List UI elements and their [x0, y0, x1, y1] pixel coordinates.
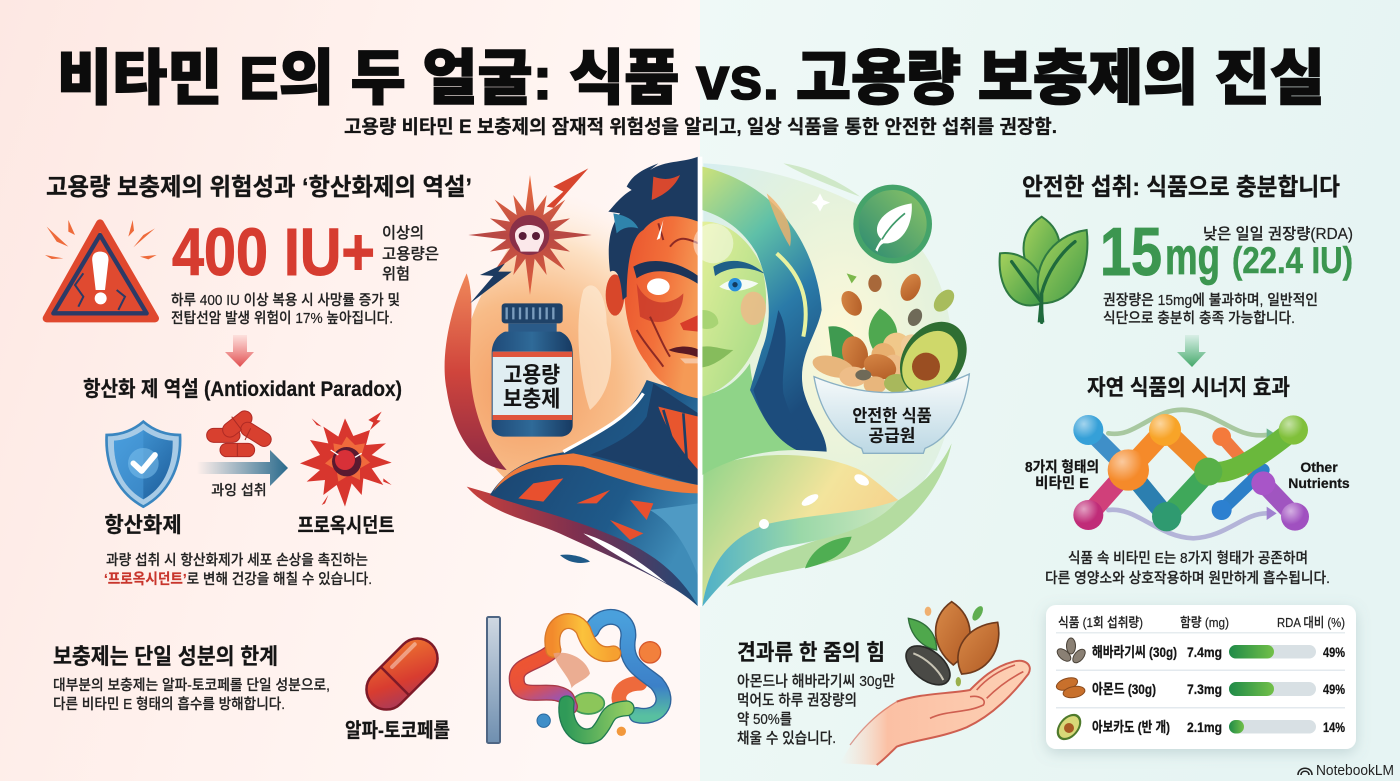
text: single ingredient body: 다른 비타민 E 형태의 흡수를 방해합니다. [53, 696, 285, 713]
row: sunflower seeds: 49% [1323, 644, 1345, 660]
text: mortality risk [171, 292, 400, 327]
text: RDA body [1103, 292, 1318, 327]
synergy arrows [1108, 410, 1277, 538]
title: 비타민 E의 두 얼굴: 식품 vs. 고용량 보충제의 진실 [57, 45, 1325, 112]
text: RDA body: 권장량은 15mg에 불과하며, 일반적인 [1103, 292, 1318, 309]
diagram: molecule synergy [1073, 410, 1309, 538]
woman hair [702, 167, 827, 452]
icon: supplement bottle [492, 303, 573, 437]
sparkle [812, 193, 830, 212]
heading: synergy: 자연 식품의 시너지 효과 [1087, 375, 1290, 400]
row: avocado: 14% [1323, 719, 1345, 735]
text: paradox explanation: 과량 섭취 시 항산화제가 세포 손상을 촉진하는 [106, 552, 368, 569]
stat: 400 IU+: 400 IU+ [172, 215, 375, 290]
panel: single ingredient limit [53, 617, 663, 743]
stat caption: 위험 [382, 265, 410, 283]
label: eight forms: 8가지 형태의 [1025, 459, 1099, 476]
green outer sweep [727, 443, 952, 587]
woman face [702, 222, 766, 397]
stat caption [382, 224, 439, 283]
center divider [698, 157, 702, 607]
stat: 15mg [1100, 214, 1353, 290]
text: synergy body [1045, 550, 1330, 587]
icon: vitamin E forms swirl [517, 617, 663, 736]
heading: antioxidant paradox: 항산화 제 역설 (Antioxidant Paradox) [83, 378, 402, 401]
icon: capsule [358, 630, 446, 718]
heading: single ingredient: 보충제는 단일 성분의 한계 [53, 644, 278, 669]
text: synergy body: 식품 속 비타민 E는 8가지 형태가 공존하며 [1068, 550, 1308, 567]
text: paradox explanation: ‘프로옥시던트’로 변해 건강을 해칠 수 있습니다. [104, 571, 372, 588]
text: mortality risk: 전탑선암 발생 위험이 17% 높아집니다. [171, 310, 393, 327]
label: alpha tocopherol: 알파-토코페롤 [345, 719, 450, 742]
panel: handful of nuts [737, 602, 1030, 765]
heading: supplement risk: 고용량 보충제의 위험성과 ‘항산화제의 역설’ [46, 174, 472, 201]
subtitle: 고용량 비타민 E 보충제의 잠재적 위험성을 알리고, 일상 식품을 통한 안전한 섭취를 권장함. [344, 116, 1057, 138]
text: single ingredient body: 대부분의 보충제는 알파-토코페롤 단일 성분으로, [53, 677, 330, 694]
bowl label: 안전한 식품 [852, 407, 932, 426]
table header: 식품 (1회 섭취량) [1058, 615, 1143, 630]
icon: green leaves [1000, 217, 1087, 322]
panel: food table [1046, 605, 1356, 749]
row: almonds [1055, 675, 1345, 699]
arrow: down red [225, 335, 254, 367]
text: single ingredient body [53, 677, 330, 713]
soft safe background [703, 163, 954, 550]
label: excess intake: 과잉 섭취 [211, 482, 267, 498]
background: right panel [700, 0, 1400, 781]
left half: toxic man [445, 157, 698, 607]
text: nuts body: 채울 수 있습니다. [737, 730, 836, 747]
leaf badge [853, 185, 932, 263]
central illustration: two faces [445, 157, 980, 607]
stat: 15mg: 15 [1100, 214, 1162, 290]
row: sunflower seeds: 해바라기씨 (30g) [1092, 644, 1177, 660]
text: mortality risk: 하루 400 IU 이상 복용 시 사망률 증가 및 [171, 292, 400, 309]
label: other nutrients [1288, 459, 1350, 491]
stat: 15mg: (22.4 IU) [1232, 240, 1353, 281]
bottle label text 2: 보충제 [503, 387, 560, 412]
woman body [702, 455, 898, 607]
label: other nutrients: Other [1300, 459, 1338, 475]
row: avocado [1052, 709, 1345, 745]
heading: nuts: 견과류 한 줌의 힘 [737, 640, 885, 665]
man face [622, 208, 698, 398]
bottle label text: 고용량 [503, 362, 560, 387]
stat caption: 낮은 일일 권장량(RDA) [1203, 225, 1353, 243]
man body [490, 380, 698, 607]
icon: prooxidant burst [300, 412, 392, 507]
label: eight forms [1025, 459, 1099, 492]
icon: avocado [1052, 709, 1086, 745]
text: nuts body: 아몬드나 해바라기씨 30g만 [737, 673, 895, 690]
man hair [608, 157, 698, 300]
background: left panel [0, 0, 700, 781]
icon: almonds [1055, 675, 1086, 699]
row: sunflower seeds: 7.4mg [1187, 644, 1222, 660]
arrow: excess intake [197, 450, 288, 486]
icon: skull burst [468, 168, 592, 303]
table header [1058, 615, 1345, 630]
dark red sweep [445, 273, 507, 470]
man ear [606, 274, 624, 316]
stat caption: 고용량은 [382, 245, 439, 263]
row: avocado: 2.1mg [1187, 719, 1222, 735]
text: paradox explanation [104, 552, 372, 588]
text: RDA body: 식단으로 충분히 충족 가능합니다. [1103, 310, 1295, 327]
label: other nutrients: Nutrients [1288, 475, 1350, 491]
icon: red pills [207, 408, 274, 457]
label: antioxidant: 항산화제 [104, 514, 182, 537]
heading: safe intake: 안전한 섭취: 식품으로 충분합니다 [1022, 174, 1340, 201]
lower sweep [467, 487, 698, 607]
text: synergy body: 다른 영양소와 상호작용하며 원만하게 흡수됩니다. [1045, 570, 1330, 587]
label: eight forms: 비타민 E [1035, 475, 1089, 492]
icon: warning triangle [45, 220, 157, 318]
warm flame background [463, 173, 698, 480]
label: prooxidant: 프로옥시던트 [298, 514, 394, 537]
food bowl [810, 308, 980, 453]
row: almonds: 7.3mg [1187, 681, 1222, 697]
row: sunflower seeds [1055, 638, 1345, 665]
table header: RDA 대비 (%) [1277, 615, 1345, 630]
text: nuts body [737, 673, 895, 747]
panel: high-dose risk [45, 174, 472, 588]
text: nuts body: 먹어도 하루 권장량의 [737, 692, 857, 709]
right half: healthy woman [693, 163, 980, 607]
stat: 15mg: mg [1165, 228, 1220, 286]
table card [1046, 605, 1356, 749]
text: nuts body: 약 50%를 [737, 711, 792, 728]
row: almonds: 49% [1323, 681, 1345, 697]
panel: safe intake [1000, 174, 1353, 587]
icon: sunflower seeds [1055, 638, 1088, 665]
arrow: down green [1177, 335, 1206, 367]
row: almonds: 아몬드 (30g) [1092, 681, 1156, 697]
falling nuts and seeds [837, 271, 958, 328]
diagram: antioxidant to prooxidant [104, 408, 394, 537]
icon: hand with nuts [840, 602, 1030, 765]
brand: NotebookLM: NotebookLM [1316, 763, 1394, 779]
bowl sublabel: 공급원 [869, 427, 915, 446]
table header: 함량 (mg) [1180, 615, 1229, 630]
row: avocado: 아보카도 (반 개) [1092, 719, 1170, 735]
divider bar [487, 617, 500, 743]
woman neck [702, 363, 797, 475]
icon: shield [107, 422, 180, 507]
stat caption: 이상의 [382, 224, 424, 242]
